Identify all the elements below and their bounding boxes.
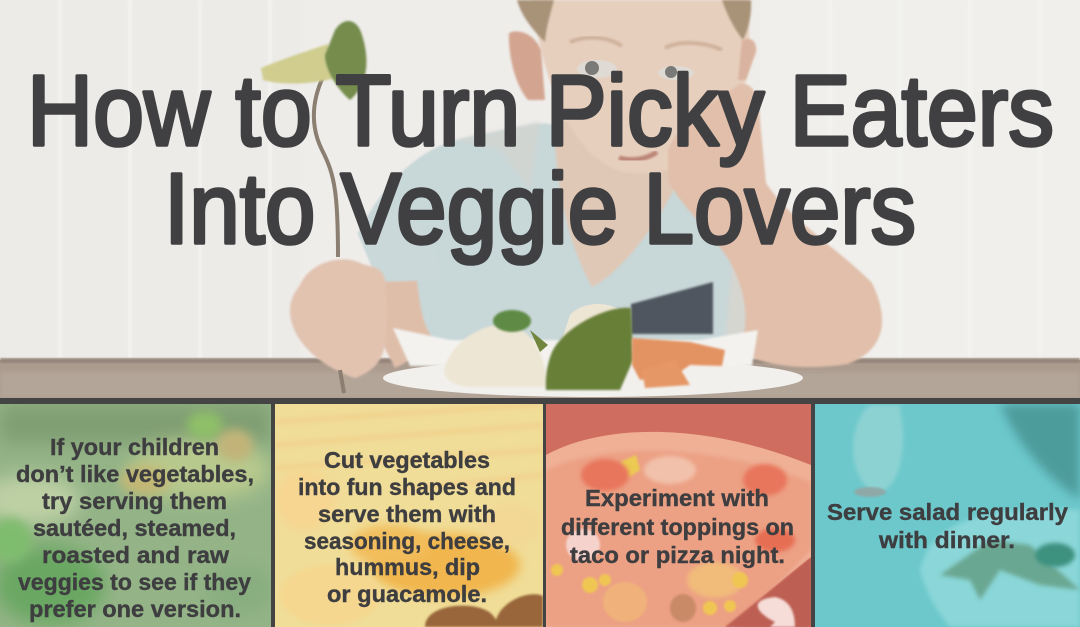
left arm [384,280,432,368]
panel 3 text: Experiment with [585,485,769,511]
panel 3 text [561,485,794,568]
panel 2 text: seasoning, cheese, [304,528,510,554]
shirt pocket [631,282,713,334]
panel 2 text: Cut vegetables [324,447,490,473]
panel 2 text: serve them with [318,501,496,527]
title: Into Veggie Lovers [164,153,916,265]
mouth [619,152,657,160]
panel 3 text: different toppings on [561,514,794,540]
panel 4 text: with dinner. [878,527,1015,553]
shirt [358,123,765,345]
eyes [577,60,617,78]
panel 1 text: If your children [50,434,219,460]
panel 1 text: try serving them [42,488,227,514]
head [533,0,750,120]
ears [509,31,545,100]
panel 1 text: don’t like vegetables, [16,461,254,487]
panel 2 text: into fun shapes and [298,474,516,500]
title [27,55,1054,265]
panel 4 text: Serve salad regularly [827,499,1068,525]
broccoli on fork [261,21,366,100]
fist [290,259,387,378]
panel 2 text: hummus, dip [335,554,480,580]
photo: boy with vegetables at table [0,0,1080,398]
fork [314,77,344,393]
panel 2 text [298,447,516,607]
hair [517,0,751,42]
panel 1 text [16,434,254,622]
leaning arm and hand on cheek [668,84,882,367]
vegetables on plate [444,304,725,390]
neck [554,120,674,287]
table [0,358,1080,398]
panel 4 text [827,499,1068,553]
panel 3 text: taco or pizza night. [570,542,785,568]
panel 1 text: prefer one version. [29,596,241,622]
plate [383,328,803,397]
panel 1 text: sautéed, steamed, [33,515,236,541]
panel backgrounds [0,398,1080,627]
panel 1 text: veggies to see if they [18,569,251,595]
panel 1 text: roasted and raw [42,542,229,568]
panel 2 text: or guacamole. [327,581,487,607]
